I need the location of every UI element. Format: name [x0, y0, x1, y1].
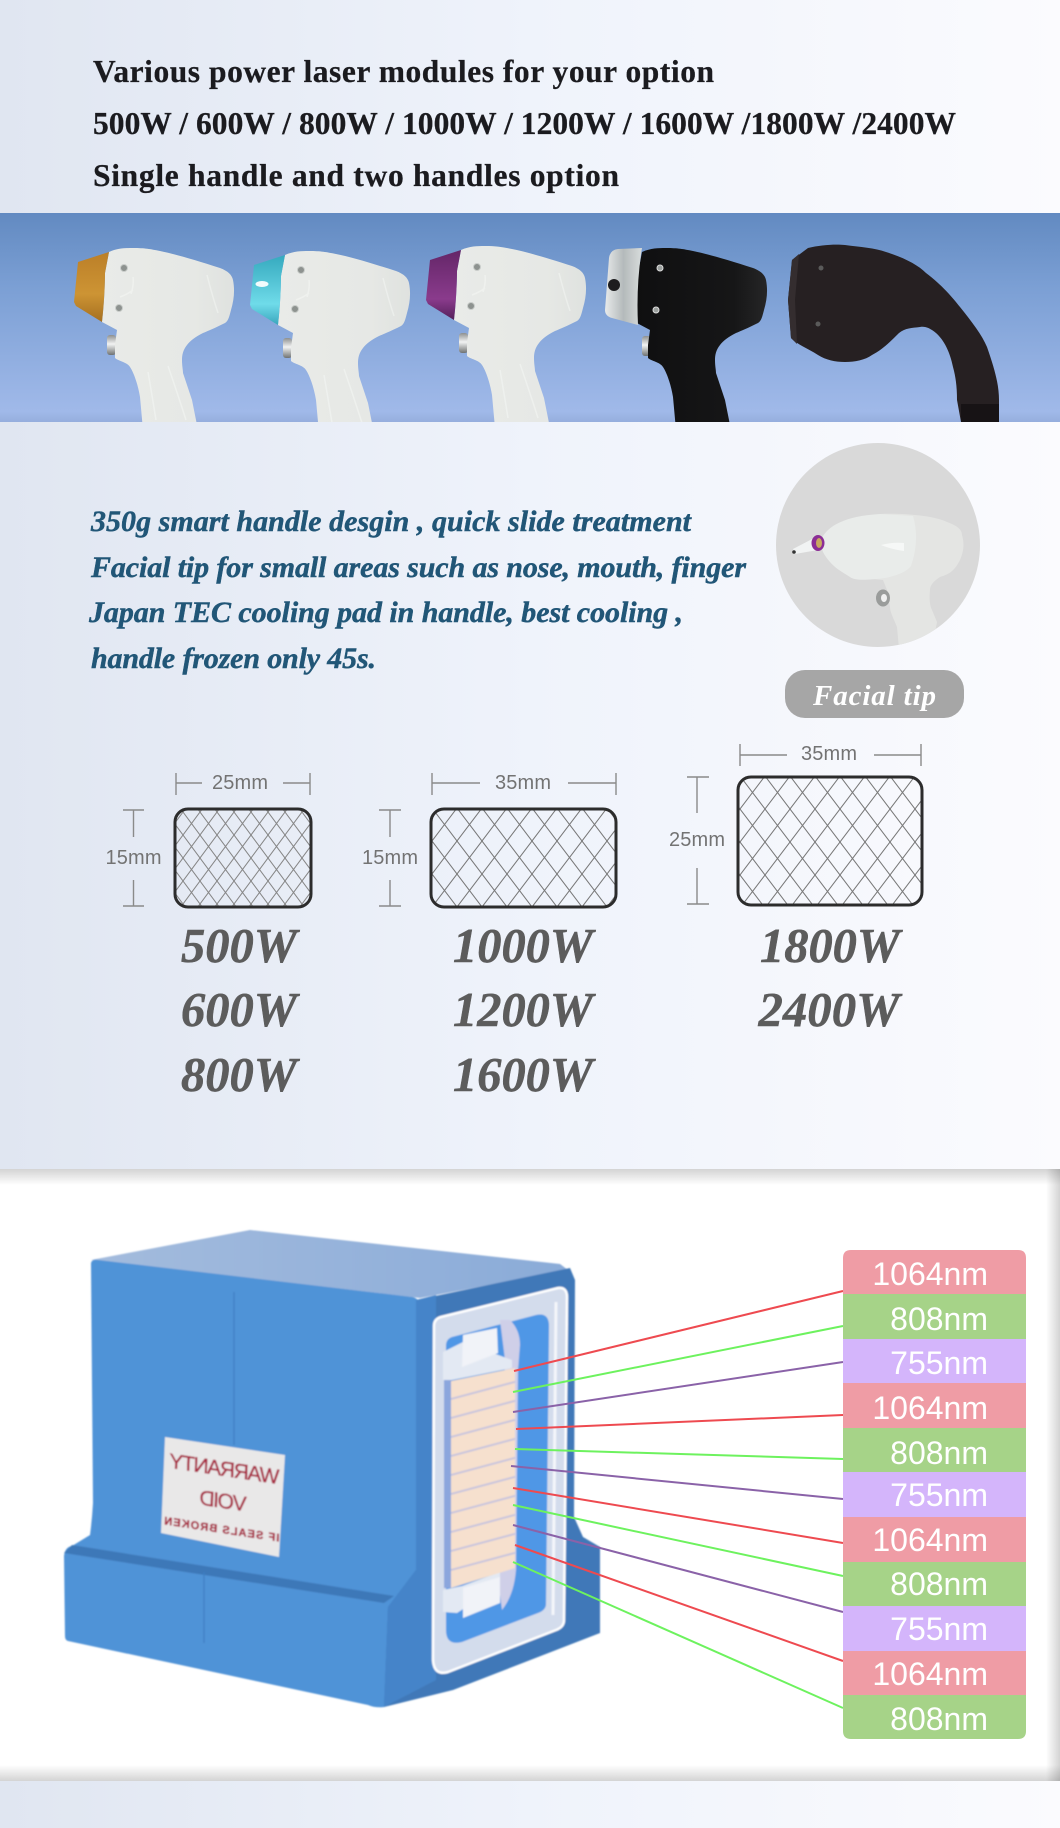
bottom left block [443, 1572, 500, 1613]
connector lines: emitters to wavelengths [511, 1291, 843, 1708]
power list: 35x25: 1800W [760, 918, 903, 973]
label: facial tip pill: Facial tip [812, 680, 936, 712]
power list: 35x15: 1000W [453, 918, 596, 973]
diagram: 25x15 spot size: 25mm [212, 772, 268, 794]
gasket inner white line [553, 1302, 556, 1615]
text block: handle features: Facial tip for small areas such as nose, mouth, finger [90, 551, 746, 584]
diagram: 35x15 spot size [362, 772, 616, 907]
light strip [498, 1320, 520, 1610]
power list: 25x15: 500W [181, 918, 300, 973]
wavelength list: 755nm [890, 1611, 988, 1647]
illustration: blue laser module [64, 1230, 600, 1707]
power list: 35x25: 2400W [758, 982, 903, 1037]
wavelength list: 1064nm [872, 1656, 988, 1692]
panel: laser module wavelengths [0, 1169, 1060, 1781]
diagram: 35x15 spot size: 35mm [495, 772, 551, 794]
text block: handle features: Japan TEC cooling pad in handle, best cooling , [88, 596, 683, 629]
warranty sticker: WARRANTY [169, 1450, 280, 1489]
white gasket frame [433, 1288, 567, 1673]
label: facial tip pill [785, 670, 964, 718]
wavelength list: 1064nm [872, 1256, 988, 1292]
wavelength list: 808nm [890, 1301, 988, 1337]
warranty sticker [161, 1437, 285, 1557]
power list: 35x25 [758, 918, 903, 1037]
diagram: 25x15 spot size: 15mm [106, 847, 162, 869]
heading: power options: 500W / 600W / 800W / 1000W / 1200W / 1600W /1800W /2400W [93, 106, 956, 141]
top clip [462, 1328, 498, 1367]
power list: 35x15: 1200W [453, 982, 596, 1037]
power list: 25x15 [181, 918, 300, 1102]
icon: facial tip handle photo [776, 443, 980, 660]
wavelength list: 1064nm [872, 1522, 988, 1558]
power list: 35x15: 1600W [453, 1047, 596, 1102]
wavelength list: 808nm [890, 1566, 988, 1602]
wavelength list [843, 1250, 1026, 1739]
wavelength list: 808nm [890, 1435, 988, 1471]
diagram: 35x25 spot size [669, 743, 922, 905]
diagram: 35x15 spot size: 15mm [362, 847, 418, 869]
warranty sticker: IF SEALS BROKEN [164, 1515, 280, 1545]
power list: 35x15 [453, 918, 596, 1102]
icon: handle with orange head [74, 248, 234, 430]
heading: power options: Various power laser modules for your option [93, 54, 714, 89]
wavelength list: 755nm [890, 1345, 988, 1381]
heading: power options: Single handle and two handles option [93, 158, 619, 193]
text block: handle features [88, 505, 746, 675]
power list: 25x15: 600W [181, 982, 300, 1037]
icon: handle with teal head [250, 251, 410, 433]
icon: dark curved handle [788, 245, 999, 422]
left clip area [443, 1342, 512, 1380]
heading: power options [93, 54, 956, 193]
text block: handle features: 350g smart handle desgin , quick slide treatment [90, 505, 693, 538]
wavelength list: 755nm [890, 1477, 988, 1513]
diagram: 35x25 spot size: 35mm [801, 743, 857, 765]
blue cavity [446, 1314, 549, 1643]
icon: black handle with silver head [605, 248, 767, 430]
diagram: 25x15 spot size [106, 772, 311, 907]
bar side strip [444, 1380, 451, 1588]
diagram: 35x25 spot size: 25mm [669, 829, 725, 851]
warranty sticker: VOID [199, 1487, 247, 1516]
bottom clip [463, 1577, 500, 1618]
laser bar array [451, 1368, 515, 1588]
wavelength list: 1064nm [872, 1390, 988, 1426]
panel: handle lineup band [0, 213, 1060, 433]
wavelength list: 808nm [890, 1701, 988, 1737]
icon: handle with purple head [426, 246, 586, 428]
power list: 25x15: 800W [181, 1047, 300, 1102]
text block: handle features: handle frozen only 45s. [91, 642, 376, 675]
